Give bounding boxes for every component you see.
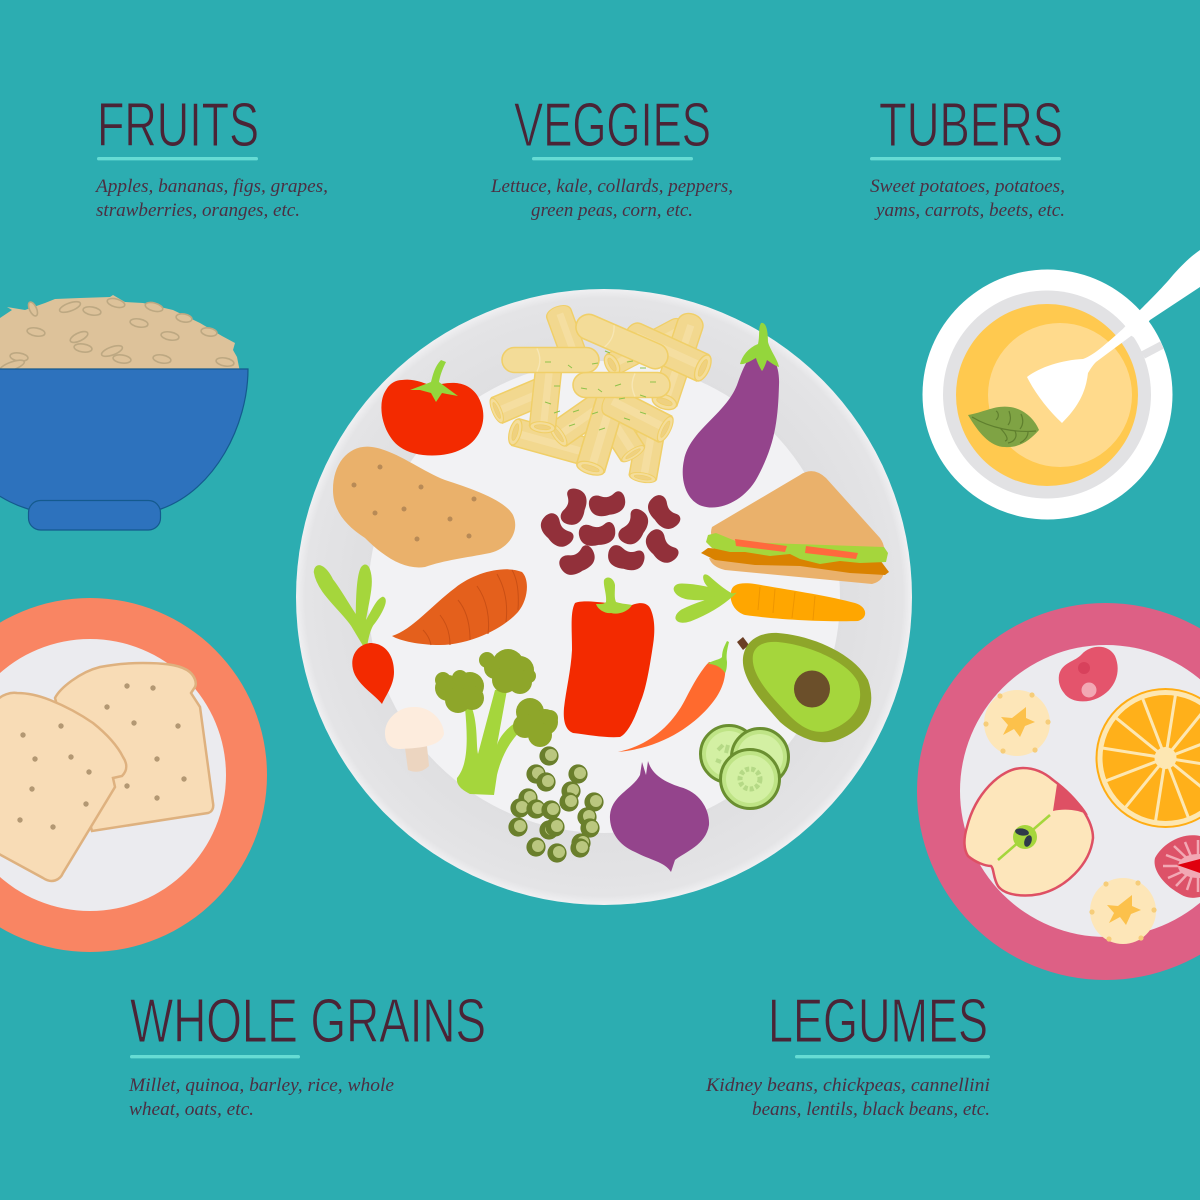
text block: tubers examples: yams, carrots, beets, etc. <box>874 200 1065 221</box>
text block: whole grains examples: Millet, quinoa, barley, rice, whole <box>128 1075 394 1096</box>
text block: legumes examples: Kidney beans, chickpeas, cannellini <box>705 1075 990 1096</box>
icon: beet <box>610 761 709 872</box>
icon: strawberry <box>1155 835 1200 898</box>
icon: bowl of oats <box>0 295 248 530</box>
text block: whole grains examples: wheat, oats, etc. <box>129 1099 254 1120</box>
icon: banana slice <box>983 690 1051 756</box>
heading: veggies: VEGGIES <box>514 91 711 160</box>
icon: red bell pepper <box>564 578 654 737</box>
icon: plate of bread <box>0 598 267 952</box>
icon: kidney beans <box>536 487 683 579</box>
icon: banana slice <box>1089 878 1157 944</box>
panel: tubers text <box>870 91 1065 221</box>
panel: legumes text <box>705 987 990 1120</box>
heading: fruits: FRUITS <box>97 91 259 160</box>
icon: chili pepper <box>618 641 729 752</box>
icon: mushroom <box>385 707 444 772</box>
heading: legumes: LEGUMES <box>768 987 988 1056</box>
icon: fig <box>1059 647 1118 701</box>
icon: eggplant <box>683 323 779 508</box>
icon: plate of fruit <box>917 603 1200 980</box>
panel: whole grains text <box>128 987 486 1120</box>
text block: fruits examples: Apples, bananas, figs, grapes, <box>94 176 328 197</box>
text block: veggies examples: green peas, corn, etc. <box>531 200 693 221</box>
icon: sandwich <box>701 471 889 584</box>
icon: green peas <box>508 746 604 863</box>
panel: veggies text <box>490 91 733 221</box>
icon: orange slice <box>1096 688 1200 828</box>
panel: central plate <box>296 289 912 905</box>
heading: whole grains: WHOLE GRAINS <box>130 987 486 1056</box>
icon: broccoli <box>435 649 558 795</box>
icon: cucumber slices <box>700 726 788 808</box>
heading: tubers: TUBERS <box>879 91 1063 160</box>
icon: tomato <box>381 360 483 456</box>
text block: fruits examples: strawberries, oranges, etc. <box>96 200 300 221</box>
text block: veggies examples: Lettuce, kale, collards, peppers, <box>490 176 733 197</box>
text block: tubers examples: Sweet potatoes, potatoes, <box>870 176 1065 197</box>
icon: bowl of soup with spoon <box>922 250 1200 520</box>
icon: pasta penne <box>487 302 715 485</box>
text block: legumes examples: beans, lentils, black beans, etc. <box>752 1099 990 1120</box>
icon: apple half <box>964 768 1093 895</box>
icon: radish <box>315 566 394 704</box>
icon: carrot <box>675 576 865 621</box>
icon: sweet potato <box>392 569 527 645</box>
icon: avocado <box>737 633 871 742</box>
icon: potato <box>333 447 515 567</box>
panel: fruits text <box>94 91 328 221</box>
